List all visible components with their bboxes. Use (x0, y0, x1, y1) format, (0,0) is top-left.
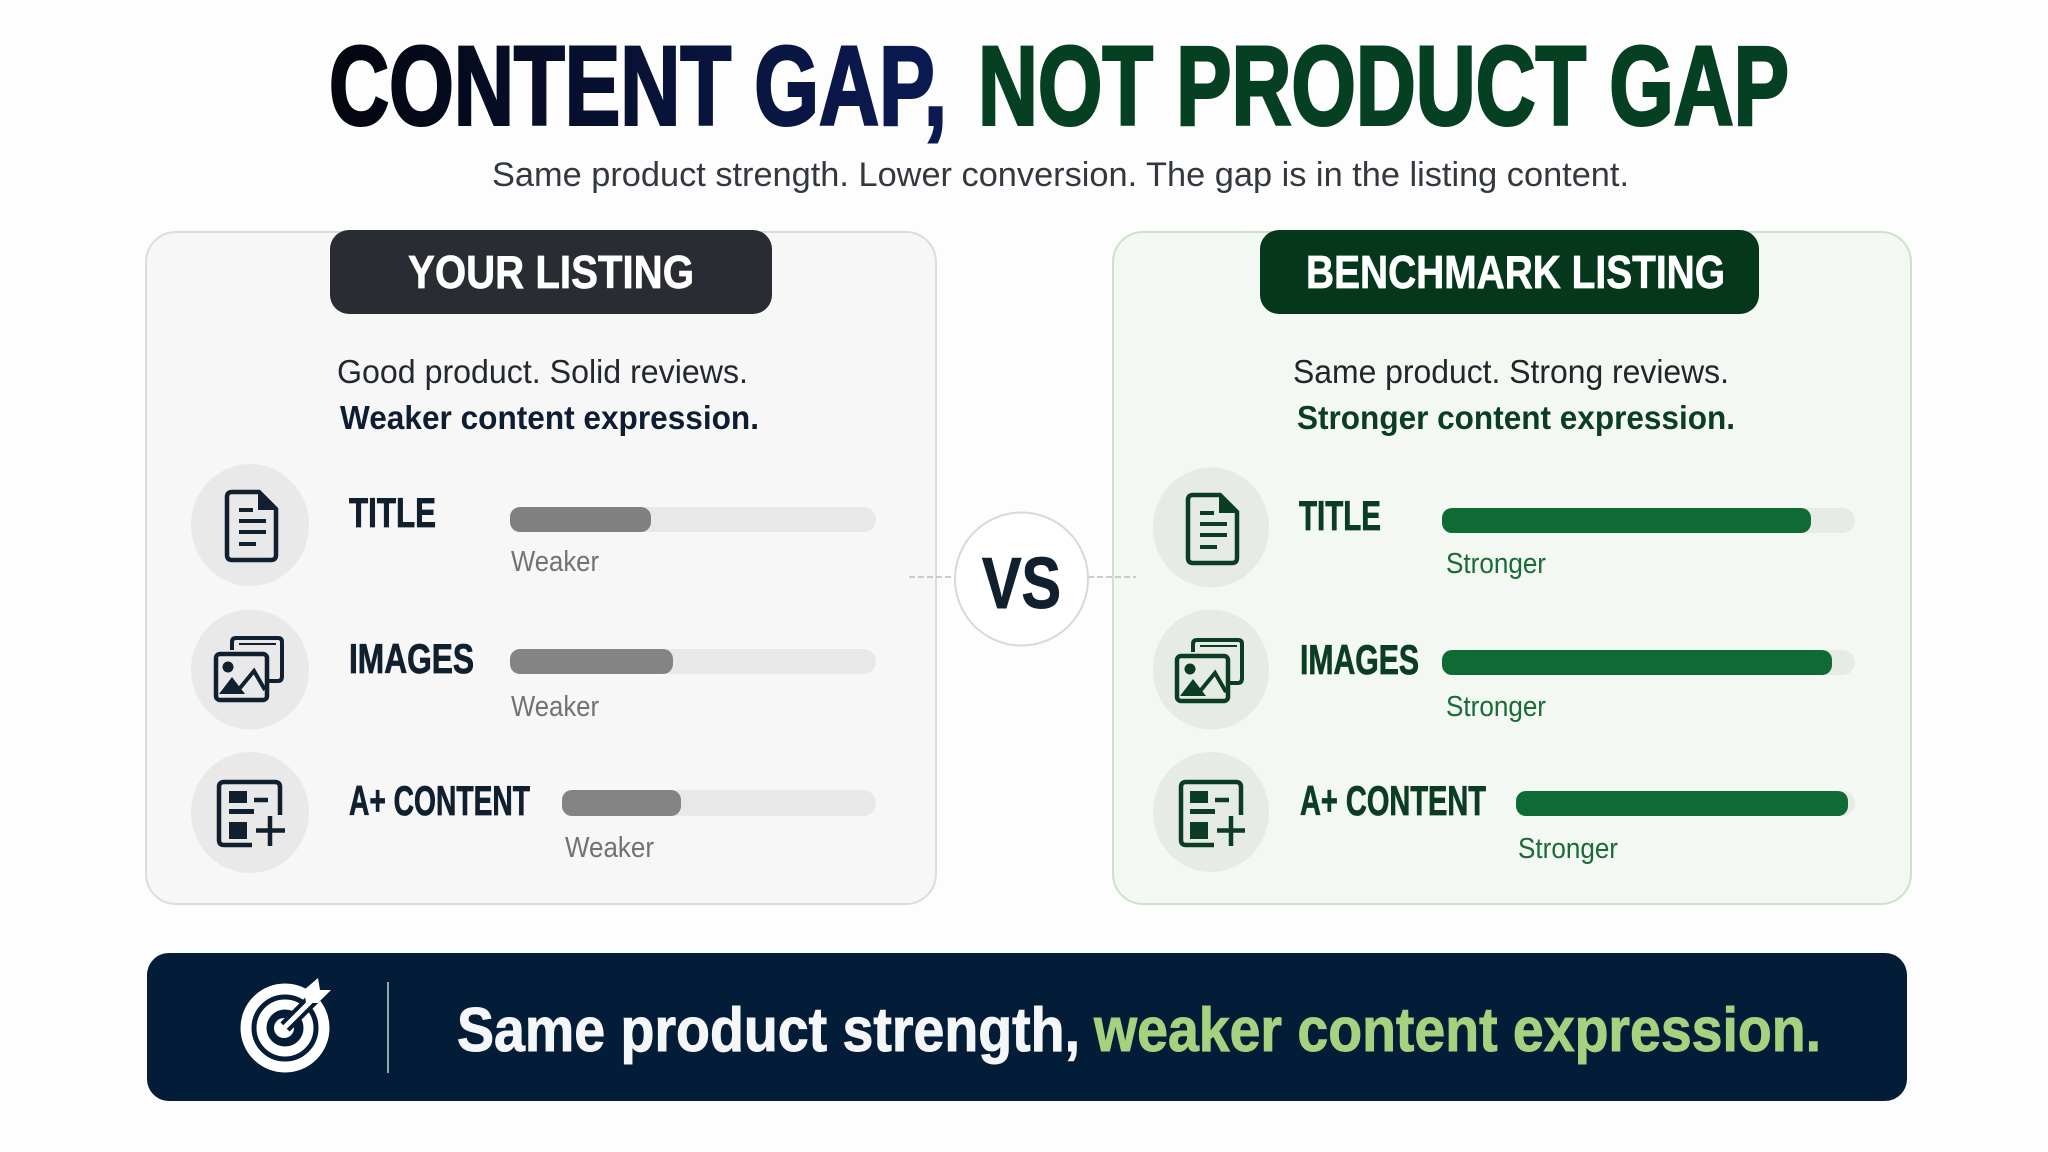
value: stronger: Stronger (1518, 833, 1618, 865)
takeaway text: weaker content expression. (1093, 996, 1821, 1065)
label: a+ content: A+ CONTENT (349, 777, 530, 824)
badge: your listing (330, 230, 772, 314)
panel: your listing (146, 230, 936, 904)
title (329, 24, 1789, 148)
badge: benchmark listing: BENCHMARK LISTING (1306, 246, 1725, 298)
label: images: IMAGES (1300, 636, 1419, 683)
badge: your listing: YOUR LISTING (408, 246, 694, 298)
icon: document (191, 464, 309, 586)
label: a+ content: A+ CONTENT (1300, 777, 1486, 824)
label: title: TITLE (349, 489, 436, 536)
row: images weaker (191, 610, 876, 730)
value: weaker: Weaker (511, 546, 599, 578)
description: benchmark listing (1293, 353, 1735, 436)
row: a+ content stronger (1153, 752, 1855, 872)
value: stronger: Stronger (1446, 548, 1546, 580)
divider (387, 982, 389, 1073)
vs badge (955, 512, 1088, 646)
description: benchmark listing: Stronger content expression. (1297, 399, 1735, 436)
connector: right dashes (1088, 576, 1136, 578)
label: images: IMAGES (349, 635, 474, 682)
icon: images (1153, 610, 1269, 730)
row: a+ content weaker (191, 752, 876, 873)
description: benchmark listing: Same product. Strong reviews. (1293, 353, 1729, 390)
row: images stronger (1153, 610, 1855, 730)
bar: images weaker (510, 649, 876, 674)
value: weaker: Weaker (565, 832, 654, 864)
icon: a+ content (1153, 752, 1269, 872)
badge: benchmark listing (1260, 230, 1759, 314)
label: title: TITLE (1299, 492, 1381, 539)
bar: a+ content stronger (1516, 791, 1855, 816)
bar: images stronger (1442, 650, 1855, 675)
takeaway banner (147, 953, 1907, 1101)
bar: title stronger (1442, 508, 1855, 533)
description: your listing: Good product. Solid reviews. (337, 353, 748, 390)
description: your listing (337, 353, 759, 436)
takeaway text (457, 996, 1821, 1065)
vs badge: VS (982, 544, 1061, 624)
icon: images (191, 610, 309, 730)
icon: a+ content (191, 752, 309, 873)
bar: title weaker (510, 507, 876, 532)
icon: target with arrow (246, 978, 331, 1067)
subtitle: Same product strength. Lower conversion. The gap is in the listing content. (492, 156, 1629, 194)
row: title stronger (1153, 468, 1855, 588)
value: weaker: Weaker (511, 691, 599, 723)
panel: benchmark listing (1113, 230, 1911, 904)
bar: a+ content weaker (562, 790, 876, 816)
takeaway text: Same product strength, (457, 996, 1080, 1065)
description: your listing: Weaker content expression. (340, 399, 759, 436)
title: NOT PRODUCT GAP (978, 24, 1789, 148)
row: title weaker (191, 464, 876, 586)
connector: left dashes (909, 576, 955, 578)
value: stronger: Stronger (1446, 691, 1546, 723)
icon: document (1153, 468, 1269, 588)
title: CONTENT GAP, (329, 24, 947, 148)
